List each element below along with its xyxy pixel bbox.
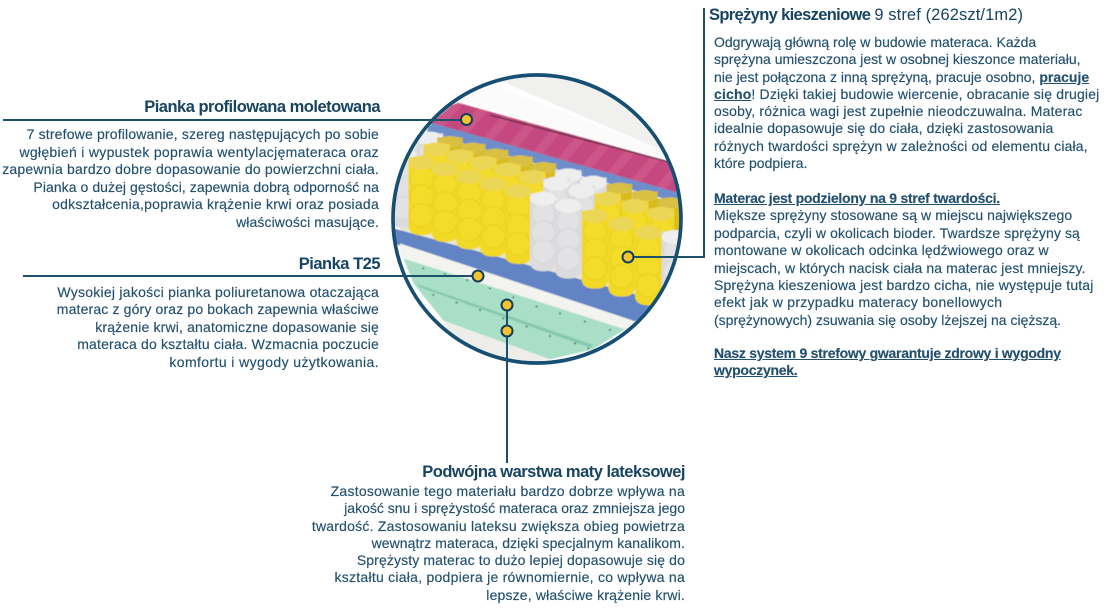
text block: lateks: wewnątrz materaca, dzięki specjalnym kanalikom. (372, 535, 685, 551)
text block: Pianka profilowana: wgłębień i wypustek poprawia wentylacjęmateraca oraz (19, 144, 379, 160)
text block: sprężyny opis: nie jest połączona z inną sprężyną, pracuje osobno, pracuje (714, 69, 1089, 85)
circle photo (390, 73, 688, 367)
text block: Pianka profilowana: 7 strefowe profilowanie, szereg następujących po sobie (27, 126, 379, 142)
heading: Sprężyny kieszeniowe: Sprężyny kieszeniowe 9 stref (262szt/1m2) (709, 6, 1023, 24)
text block: 9 stref twardości: Materac jest podzielony na 9 stref twardości. (714, 190, 1000, 206)
text block: 9 stref twardości: efekt jak w przypadku materacy bonellowych (714, 294, 1002, 310)
text block: lateks: jakość snu i sprężystość materaca oraz zmniejsza jego (344, 500, 685, 516)
text block: sprężyny opis: Odgrywają główną rolę w budowie materaca. Każda (714, 34, 1036, 50)
text block: Pianka profilowana: Pianka o dużej gęstości, zapewnia dobrą odporność na (33, 178, 379, 194)
illustration: mattress cross-section in circle with callout lines (3, 8, 705, 463)
text block: Pianka profilowana (2, 126, 379, 230)
text block: Pianka profilowana: odkształcenia,poprawia krążenie krwi oraz posiada (52, 196, 379, 212)
text block: sprężyny opis: różnych twardości sprężyn w zależności od elementu ciała, (714, 138, 1088, 154)
text block: lateks: twardość. Zastosowaniu lateksu zwiększa obieg powietrza (312, 518, 685, 534)
text block: lateks: Sprężysty materac to dużo lepiej dopasowuje się do (357, 552, 685, 568)
text block: Pianka T25 (57, 284, 379, 370)
text block: Pianka profilowana: zapewnia bardzo dobre dopasowanie do powierzchni ciała. (2, 161, 379, 177)
text block: 9 stref twardości: podparcia, czyli w okolicach bioder. Twardsze sprężyny są (714, 225, 1080, 241)
heading: Podwójna warstwa maty lateksowej: Podwójna warstwa maty lateksowej (422, 463, 685, 481)
text block: lateks: lepsze, właściwe krążenie krwi. (486, 587, 685, 603)
heading: Pianka T25: Pianka T25 (299, 255, 380, 273)
heading: Pianka profilowana moletowana: Pianka profilowana moletowana (144, 98, 380, 116)
line: Pianka T25 (23, 275, 478, 277)
text block: Pianka T25: komfortu i wygody użytkowania. (169, 354, 379, 370)
line: lateks (506, 305, 508, 463)
line: Pianka profilowana (3, 119, 466, 121)
text block: lateks (312, 483, 685, 604)
text block: sprężyny opis: idealnie dopasowuje się do ciała, dzięki zastosowania (714, 120, 1053, 136)
line: sprężyny (628, 8, 704, 257)
text block: lateks: kształtu ciała, podpiera je równomiernie, co wpływa na (335, 569, 685, 585)
text block: sprężyny opis (714, 34, 1099, 172)
text block: gwarancja (714, 345, 1061, 378)
text block: sprężyny opis: cicho! Dzięki takiej budowie wiercenie, obracanie się drugiej (714, 86, 1099, 102)
text block: 9 stref twardości: Miększe sprężyny stosowane są w miejscu największego (714, 207, 1072, 223)
text block: sprężyny opis: które podpiera. (714, 155, 807, 171)
text block: sprężyny opis: osoby, różnica wagi jest zupełnie nieodczuwalna. Materac (714, 103, 1083, 119)
text block: 9 stref twardości: Sprężyna kieszeniowa jest bardzo cicha, nie występuje tutaj (714, 277, 1093, 293)
text block: Pianka T25: Wysokiej jakości pianka poliuretanowa otaczająca (57, 284, 379, 300)
text block: sprężyny opis: sprężyna umieszczona jest w osobnej kieszonce materiału, (714, 51, 1081, 67)
marker dots (461, 114, 634, 336)
text block: 9 stref twardości (714, 190, 1093, 328)
text block: Pianka T25: krążenie krwi, anatomiczne dopasowanie się (95, 319, 379, 335)
text block: 9 stref twardości: (sprężynowych) zsuwania się osoby lżejszej na cięższą. (714, 312, 1061, 328)
text block: Pianka profilowana: właściwości masujące. (236, 214, 379, 230)
text block: gwarancja: Nasz system 9 strefowy gwarantuje zdrowy i wygodny (714, 345, 1061, 361)
text block: 9 stref twardości: montowane w okolicach odcinka lędźwiowego oraz w (714, 242, 1049, 258)
text block: gwarancja: wypoczynek. (714, 362, 797, 378)
text block: 9 stref twardości: miejscach, w których nacisk ciała na materac jest mniejszy. (714, 260, 1086, 276)
text block: lateks: Zastosowanie tego materiału bardzo dobrze wpływa na (331, 483, 685, 499)
text block: Pianka T25: materaca do kształtu ciała. Wzmacnia poczucie (77, 336, 379, 352)
text block: Pianka T25: materac z góry oraz po bokach zapewnia właściwe (57, 301, 379, 317)
